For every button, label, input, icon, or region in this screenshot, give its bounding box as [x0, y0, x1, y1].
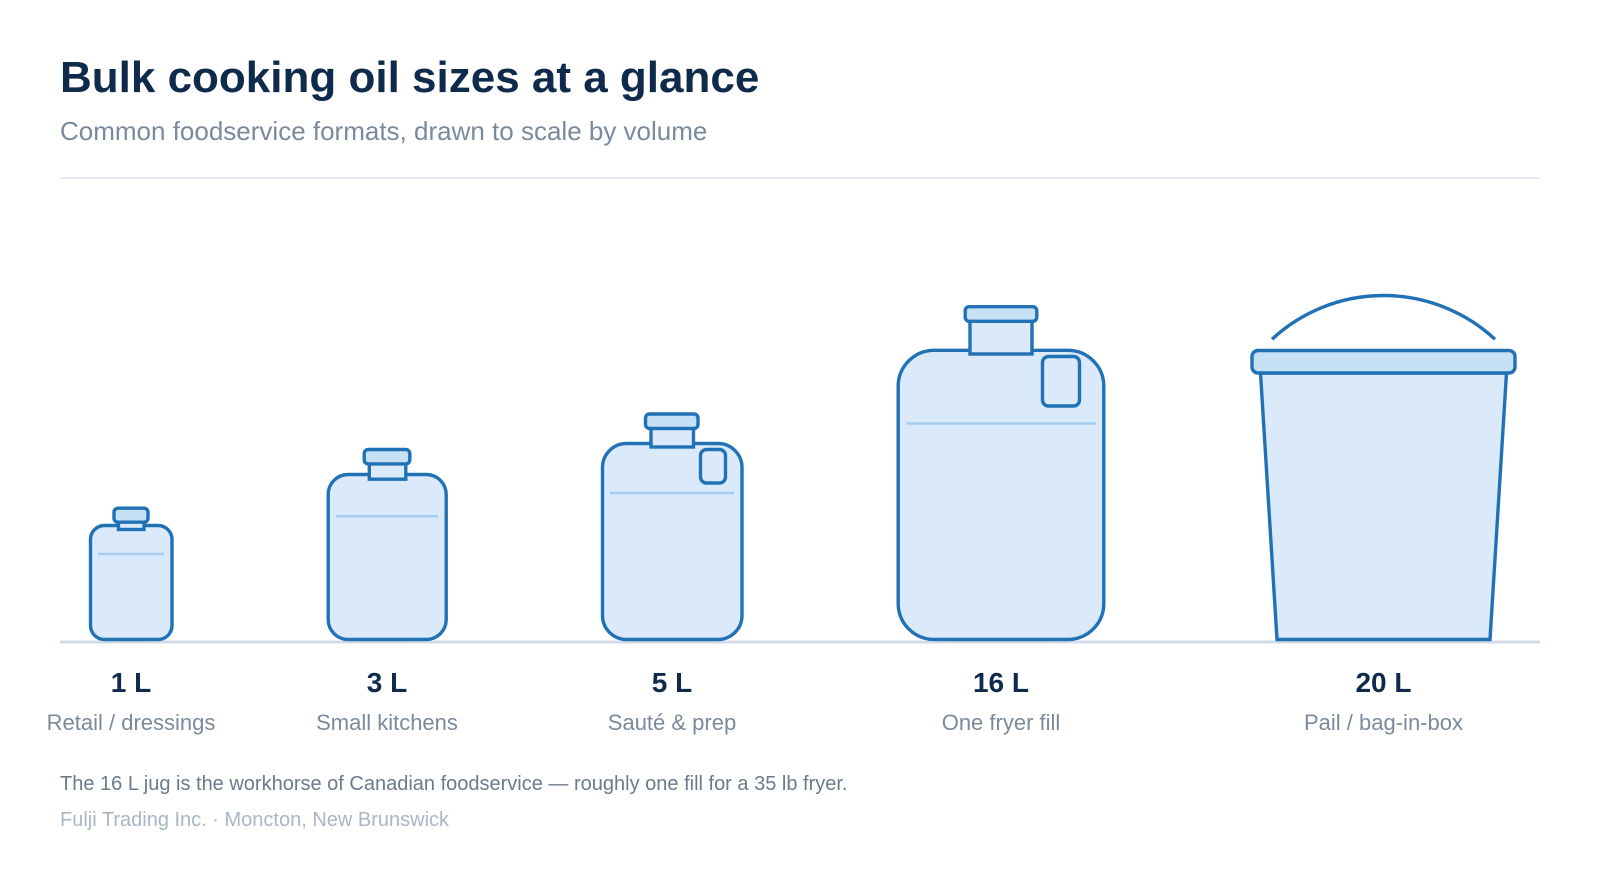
label: 20 L: [1304, 667, 1463, 735]
label: 16 L: [942, 667, 1060, 735]
label: 5 L: 5 L: [652, 667, 692, 698]
footnote: The 16 L jug is the workhorse of Canadian foodservice — roughly one fill for a 35 lb fryer.: [60, 773, 847, 795]
label: 1 L: 1 L: [111, 667, 151, 698]
icon: 5 L jug: [602, 414, 742, 640]
icon: 1 L bottle: [90, 508, 172, 640]
icon: 16 L jug: [898, 307, 1104, 640]
label: 1 L: Retail / dressings: [47, 710, 215, 735]
subtitle: Common foodservice formats, drawn to scale by volume: [60, 116, 707, 146]
label: 3 L: 3 L: [367, 667, 407, 698]
label: 3 L: Small kitchens: [316, 710, 458, 735]
label: 1 L: [47, 667, 215, 735]
label: 20 L: Pail / bag-in-box: [1304, 710, 1463, 735]
label: 5 L: Sauté & prep: [608, 710, 736, 735]
label: 5 L: [608, 667, 736, 735]
label: 20 L: 20 L: [1355, 667, 1412, 698]
credit: Fulji Trading Inc. · Moncton, New Brunswick: [60, 809, 449, 831]
icon: 20 L pail: [1252, 296, 1515, 640]
label: 3 L: [316, 667, 458, 735]
icon: 3 L bottle: [328, 450, 446, 640]
title: Bulk cooking oil sizes at a glance: [60, 53, 759, 102]
label: 16 L: One fryer fill: [942, 710, 1060, 735]
label: 16 L: 16 L: [973, 667, 1029, 698]
